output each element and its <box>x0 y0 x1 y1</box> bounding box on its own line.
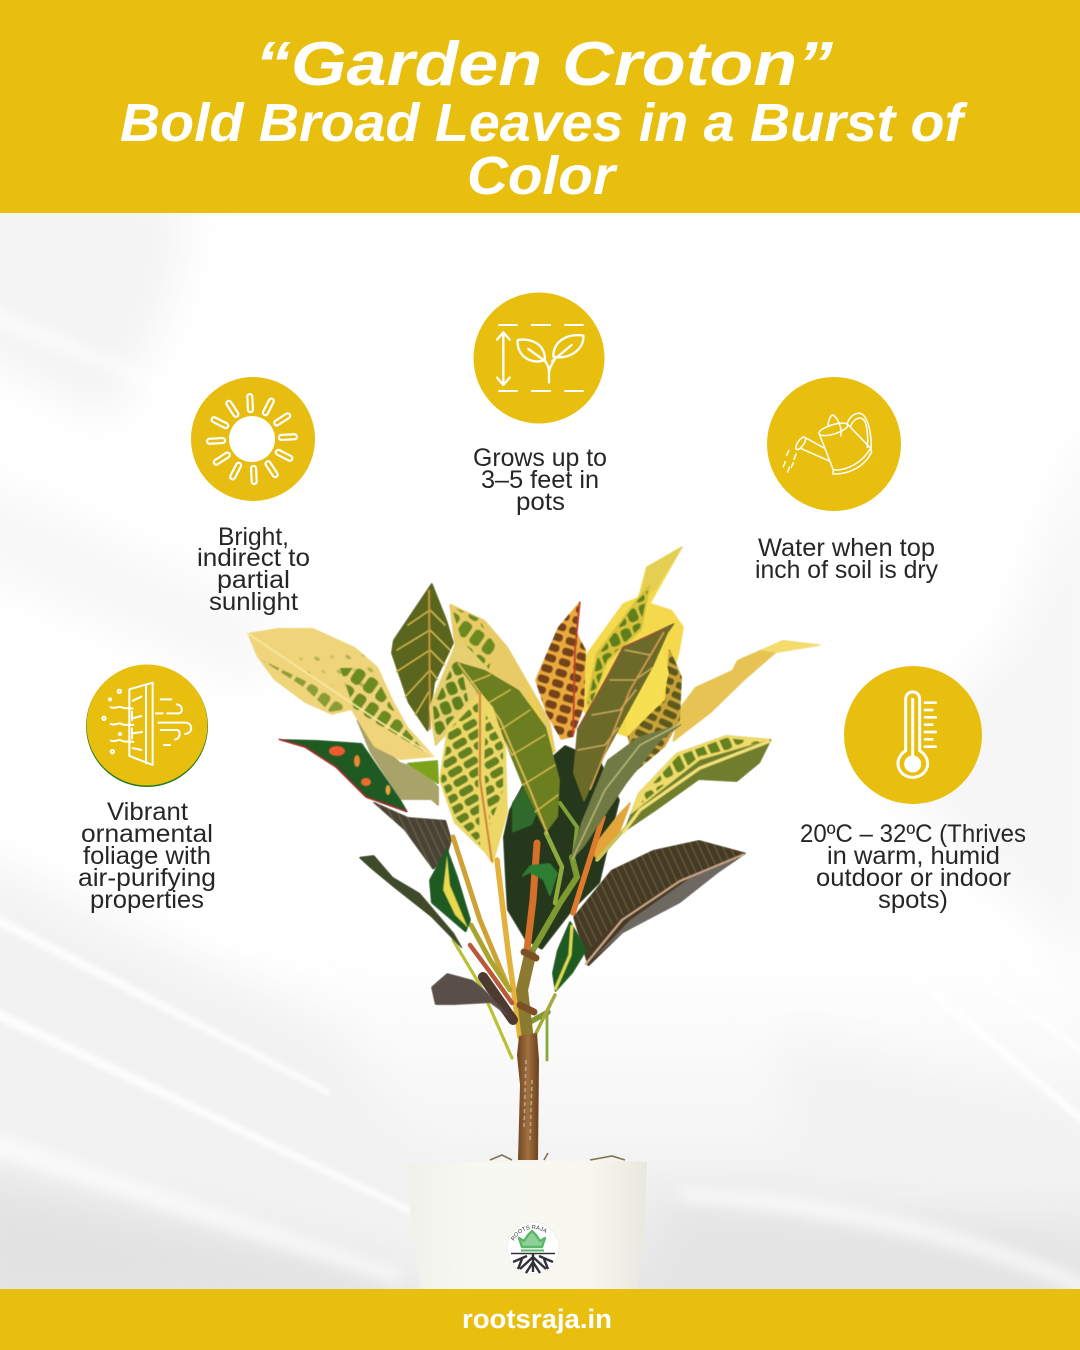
title: “Garden Croton” <box>255 30 833 99</box>
grey-brown bottom leaf <box>431 973 513 1020</box>
label: sunlight: indirect to <box>197 544 310 572</box>
title: Color <box>467 146 618 206</box>
central yellow-green leaf <box>439 692 508 865</box>
label: water: Water when top <box>758 534 935 562</box>
label: sunlight: partial <box>217 566 290 594</box>
label: foliage <box>78 798 216 914</box>
label: foliage: air-purifying <box>78 864 216 892</box>
lower-right dark leaf <box>573 840 747 967</box>
label: sunlight <box>197 523 310 616</box>
orange mottled leaf <box>535 601 586 740</box>
label: height: 3–5 feet in <box>481 466 599 494</box>
feature: height <box>473 292 607 516</box>
long pale yellow leaf <box>672 640 824 743</box>
title: Bold Broad Leaves in a Burst of <box>120 93 968 153</box>
small dark green leaf <box>512 787 545 833</box>
yellow back leaf <box>581 545 684 737</box>
dark core foliage <box>503 745 620 950</box>
green and yellow patch near the base <box>405 760 439 785</box>
small striped green leaf <box>552 920 587 993</box>
dark long leaf lower left <box>358 855 465 952</box>
icon: watering can <box>767 377 901 511</box>
soil tufts <box>490 1153 625 1160</box>
label: temperature: 20ºC – 32ºC (Thrives <box>800 820 1026 848</box>
feature: temperature <box>800 666 1026 914</box>
dark olive central leaf <box>454 661 560 835</box>
title <box>120 30 968 206</box>
brown-yellow right leaf <box>627 647 682 773</box>
small bright green leaf <box>520 863 558 898</box>
green mottled tall leaf <box>586 583 651 710</box>
pot <box>410 1160 647 1289</box>
feature: water <box>755 377 938 584</box>
plant: garden croton <box>247 545 824 1160</box>
footer url: rootsraja.in <box>462 1304 612 1334</box>
label: height: pots <box>516 488 565 516</box>
orange and yellow inner foliage <box>590 800 632 862</box>
icon: sun <box>191 377 315 501</box>
pot sticker logo: ROOTS RAJA <box>510 1224 546 1241</box>
dark olive upper-left leaf <box>391 582 454 733</box>
label: sunlight: sunlight <box>209 588 298 616</box>
header band <box>0 0 1080 213</box>
label: foliage: foliage with <box>83 842 211 870</box>
label: foliage: properties <box>90 886 204 914</box>
feature: sunlight <box>191 377 315 616</box>
red and green leaf <box>278 739 408 812</box>
icon: thermometer <box>844 666 982 804</box>
icon: air purifier <box>86 664 208 787</box>
label: sunlight: Bright, <box>218 523 289 551</box>
yellow-green upper leaf <box>449 603 556 753</box>
footer band <box>0 1289 1080 1350</box>
label: height <box>473 444 607 516</box>
label: temperature: outdoor or indoor <box>816 864 1011 892</box>
lower stems <box>453 803 630 1060</box>
dark red-brown leaf <box>370 800 452 870</box>
pot sticker logo <box>506 1222 560 1274</box>
label: foliage: Vibrant <box>107 798 188 826</box>
label: height: Grows up to <box>473 444 607 472</box>
trunk <box>517 1033 539 1160</box>
right yellow-green leaf <box>623 735 772 833</box>
feature: air-purifying foliage <box>78 664 216 914</box>
pale yellow-green leaf behind centre <box>429 637 490 747</box>
big pale leaf on left <box>247 628 435 760</box>
label: temperature <box>800 820 1026 914</box>
label: temperature: spots) <box>878 886 948 914</box>
label: foliage: ornamental <box>81 820 213 848</box>
label: water: inch of soil is dry <box>755 556 938 584</box>
pale olive leaf <box>355 717 439 807</box>
grey-green narrow leaf <box>569 723 684 863</box>
icon: plant height <box>474 292 604 424</box>
label: temperature: in warm, humid <box>827 842 1000 870</box>
green and yellow striped leaf <box>429 847 471 933</box>
large olive leaf <box>573 622 676 803</box>
label: water <box>755 534 938 584</box>
yellow strip overlapping <box>625 645 669 737</box>
